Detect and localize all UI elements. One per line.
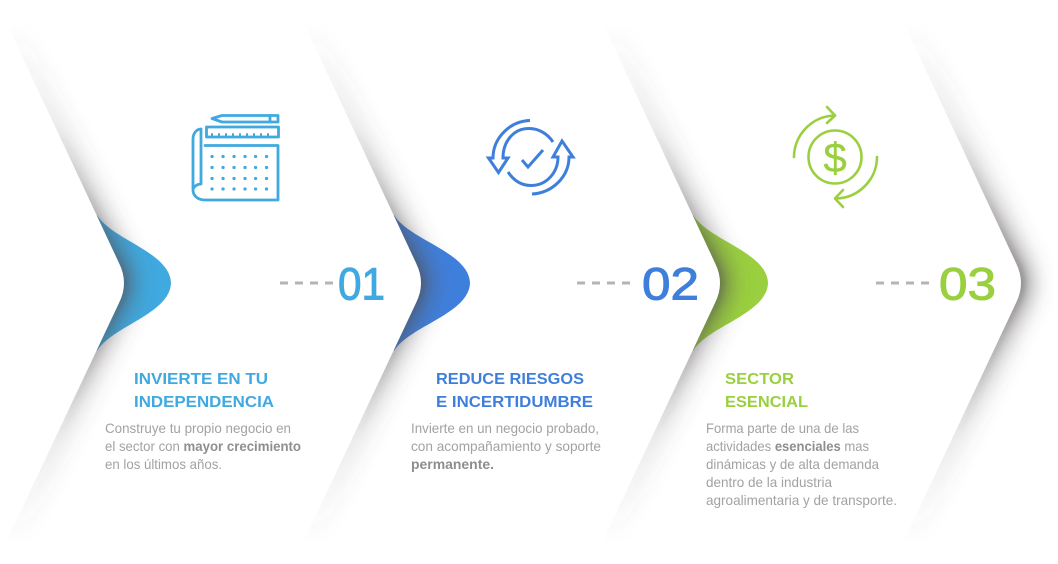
number 01 with dashes	[280, 258, 385, 310]
dollar sign: $	[823, 134, 847, 181]
panel 3 heading: SECTOR	[725, 371, 794, 388]
panel 1 heading	[134, 371, 274, 411]
panel 3 text: actividades esenciales mas	[706, 438, 869, 454]
panel 2 text: Invierte en un negocio probado,	[411, 420, 599, 436]
number 02 with dashes: 02	[642, 258, 699, 310]
panel 2 heading	[436, 371, 593, 411]
panel 2 heading: E INCERTIDUMBRE	[436, 394, 593, 411]
icon: calendar, ruler and pencil	[193, 116, 278, 200]
panel 2 text	[411, 420, 601, 472]
icon: circular arrows with check	[488, 120, 573, 194]
panel 3 heading: ESENCIAL	[725, 394, 808, 411]
chevron 0 with light blue blob	[0, 9, 171, 555]
panel 1 text: el sector con mayor crecimiento	[105, 438, 301, 454]
panel 1 heading: INDEPENDENCIA	[134, 394, 274, 411]
panel 2 text: con acompañamiento y soporte	[411, 438, 601, 454]
panel 2 text: permanente.	[411, 456, 494, 472]
panel 3 text: Forma parte de una de las	[706, 420, 859, 436]
chevron 3 edge with shadow	[597, 0, 1021, 564]
panel 1 text	[105, 420, 301, 472]
chevron 2 with green blob	[306, 0, 768, 564]
panel 3 text: dinámicas y de alta demanda	[706, 456, 879, 472]
panel 3 text	[706, 420, 897, 508]
panel 3 text: agroalimentaria y de transporte.	[706, 492, 897, 508]
icon: dollar with arrows	[794, 107, 877, 207]
number 03 with dashes: 03	[939, 258, 996, 310]
number 02 with dashes	[577, 258, 699, 310]
panel 1 text: Construye tu propio negocio en	[105, 420, 291, 436]
panel 2 heading: REDUCE RIESGOS	[436, 371, 584, 388]
number 03 with dashes	[876, 258, 996, 310]
panel 1 heading: INVIERTE EN TU	[134, 371, 268, 388]
panel 3 text: dentro de la industria	[706, 474, 832, 490]
panel 3 heading	[725, 371, 808, 411]
number 01 with dashes: 01	[338, 258, 385, 310]
chevron 1 with blue blob	[7, 0, 470, 564]
panel 1 text: en los últimos años.	[105, 456, 222, 472]
